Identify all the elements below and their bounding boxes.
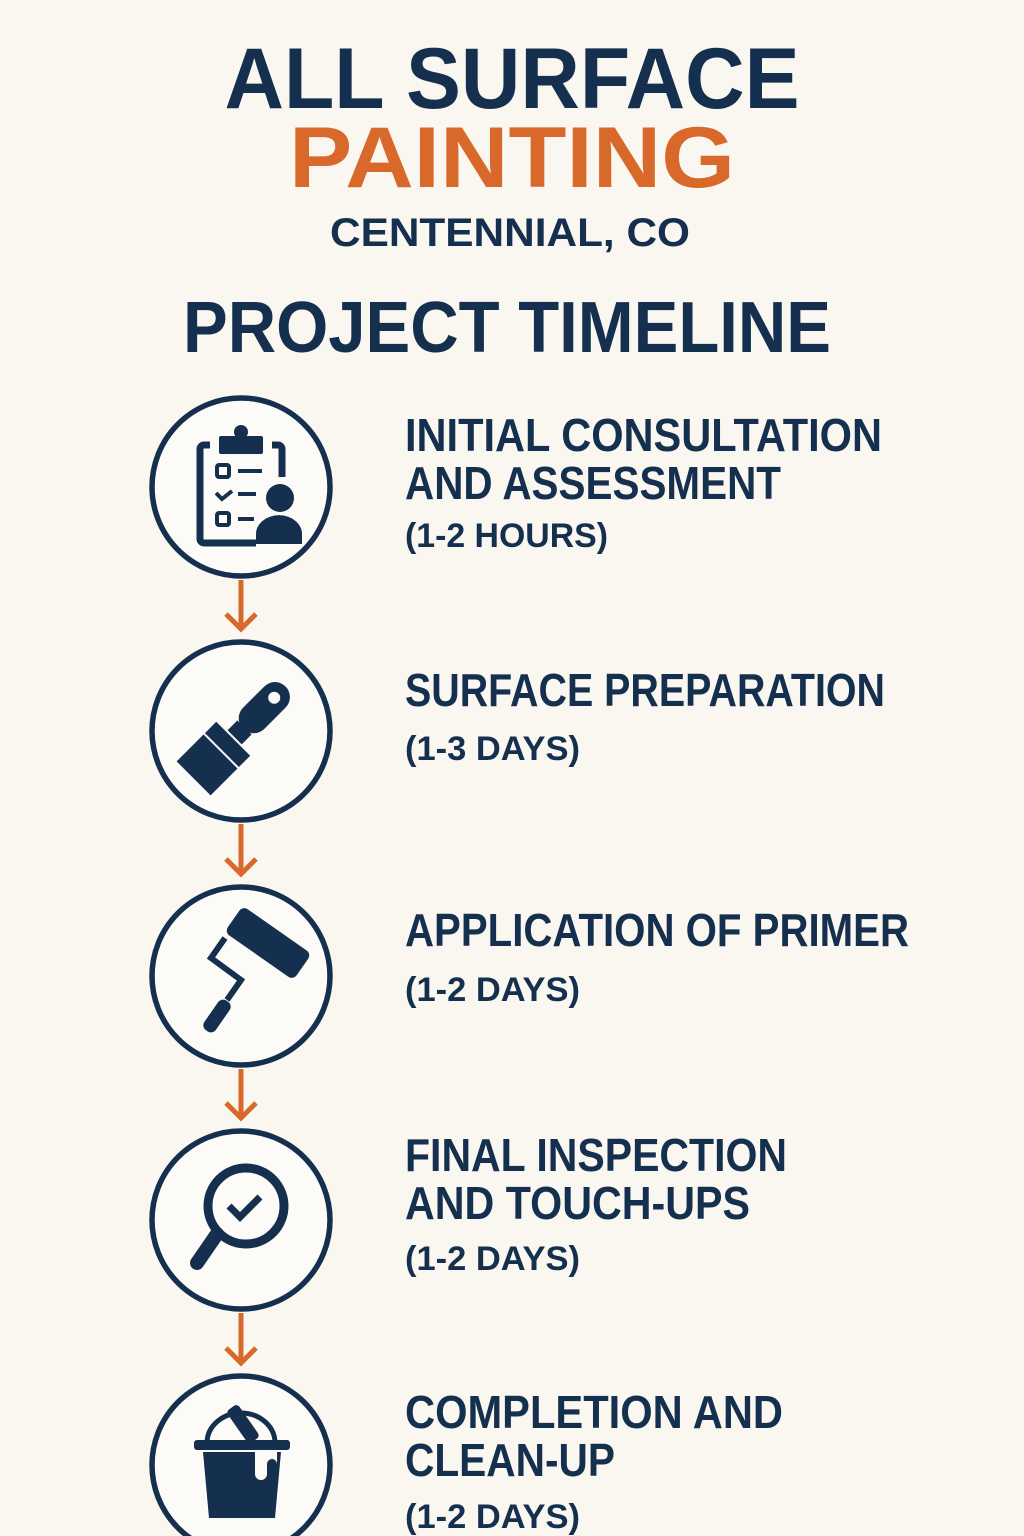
icon: paintbrush xyxy=(152,642,330,820)
step 5 xyxy=(152,1376,783,1536)
text: step 2: (1-3 DAYS) xyxy=(405,730,580,768)
icon: paint bucket xyxy=(152,1376,330,1536)
subtitle: location: CENTENNIAL, CO xyxy=(330,211,690,255)
icon: paint roller xyxy=(152,887,330,1065)
icon: magnifier check xyxy=(152,1131,330,1309)
title xyxy=(224,31,800,206)
text: step 4 xyxy=(405,1129,787,1278)
text: step 5: CLEAN-UP xyxy=(405,1434,615,1486)
step 3 xyxy=(152,887,909,1065)
text: step 4: (1-2 DAYS) xyxy=(405,1240,580,1278)
text: step 2 xyxy=(405,664,885,768)
text: step 1: (1-2 HOURS) xyxy=(405,517,608,555)
arrow 4 xyxy=(226,1313,256,1363)
text: step 3: (1-2 DAYS) xyxy=(405,971,580,1009)
title: ALL SURFACE xyxy=(224,31,800,127)
icon: clipboard consultation xyxy=(152,398,330,576)
text: step 4: FINAL INSPECTION xyxy=(405,1129,787,1181)
step 2 xyxy=(152,642,885,820)
step 4 xyxy=(152,1129,787,1309)
text: step 2: SURFACE PREPARATION xyxy=(405,664,885,716)
text: step 3 xyxy=(405,904,909,1009)
step 1 xyxy=(152,398,882,576)
text: step 5: (1-2 DAYS) xyxy=(405,1498,580,1536)
text: step 5 xyxy=(405,1386,783,1536)
text: step 1: AND ASSESSMENT xyxy=(405,457,781,509)
text: step 5: COMPLETION AND xyxy=(405,1386,783,1438)
arrow 1 xyxy=(226,580,256,629)
text: step 3: APPLICATION OF PRIMER xyxy=(405,904,909,956)
title: PAINTING xyxy=(289,110,735,206)
heading: project timeline: PROJECT TIMELINE xyxy=(183,288,831,368)
arrow 3 xyxy=(226,1069,256,1118)
text: step 1: INITIAL CONSULTATION xyxy=(405,409,882,461)
arrow 2 xyxy=(226,824,256,874)
text: step 4: AND TOUCH-UPS xyxy=(405,1177,750,1229)
text: step 1 xyxy=(405,409,882,555)
